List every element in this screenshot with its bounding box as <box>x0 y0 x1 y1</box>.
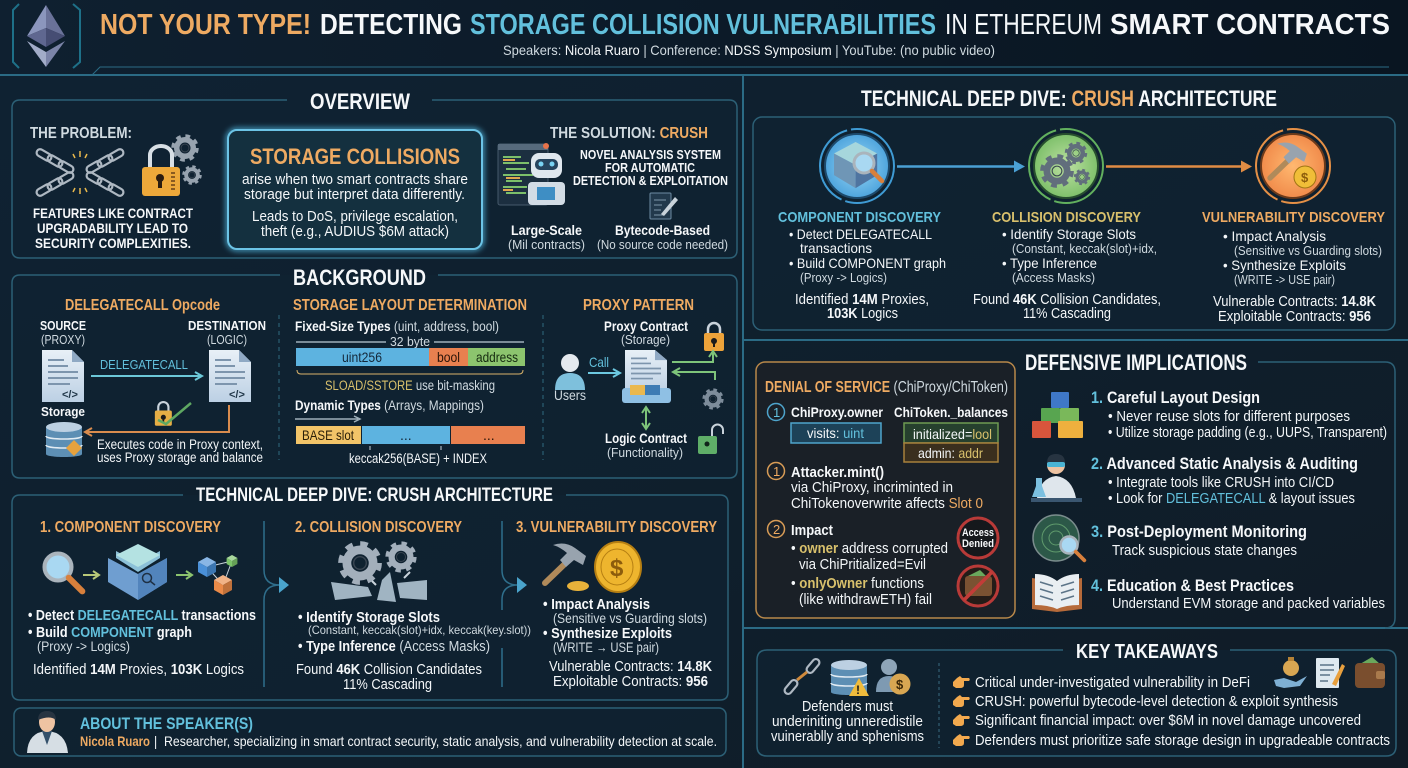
heading: defensive implications: DEFENSIVE IMPLICATIONS <box>1025 350 1247 375</box>
item 1: careful layout design <box>1091 388 1387 441</box>
step 3: impact: Impact <box>791 522 833 539</box>
icon: database warning <box>831 660 869 697</box>
column: vulnerability discovery: 3. VULNERABILITY DISCOVERY <box>516 519 717 536</box>
panel: about the speaker: Nicola Ruaro <box>80 733 150 749</box>
heading: key takeaways: KEY TAKEAWAYS <box>1076 641 1218 663</box>
storage layout diagram: 32 byte <box>390 334 430 349</box>
column: component discovery: • Build COMPONENT graph <box>28 624 192 641</box>
heading: background: BACKGROUND <box>293 265 426 290</box>
delegatecall diagram <box>40 297 266 465</box>
delegatecall diagram: DELEGATECALL Opcode <box>65 297 220 314</box>
column: vulnerability discovery: Exploitable Contracts: 956 <box>553 673 708 690</box>
column: component discovery: • Build COMPONENT graph <box>789 255 946 271</box>
callout: storage collisions: STORAGE COLLISIONS <box>250 144 460 169</box>
panel: key takeaways <box>757 641 1396 756</box>
title: DETECTING <box>320 9 462 41</box>
icon: gears with crack <box>331 544 427 602</box>
icon: vulnerability circle: $ <box>1301 170 1309 185</box>
step 2: attacker mint: 1 <box>773 464 780 479</box>
column: collision discovery: 11% Cascading <box>343 676 432 693</box>
column: vulnerability discovery <box>1202 209 1385 325</box>
delegatecall diagram: Executes code in Proxy context, <box>97 437 263 452</box>
item 3: post-deployment monitoring <box>1091 522 1307 559</box>
icon: user <box>555 354 585 390</box>
solution description: FOR AUTOMATIC <box>605 161 695 175</box>
callout: storage collisions: storage but interpret data differently. <box>244 186 465 203</box>
delegatecall diagram: SOURCE <box>40 318 86 333</box>
column: vulnerability discovery: (Sensitive vs Guarding slots) <box>553 610 707 626</box>
panel: technical deep dive left <box>12 485 728 700</box>
icon: radar <box>1033 515 1084 561</box>
bytecode-based feature: Bytecode-Based <box>615 222 710 238</box>
bar: fixed-size slot layout: uint256 <box>342 349 382 365</box>
column: component discovery: • Detect DELEGATECALL <box>789 226 932 242</box>
step 1: storage slots: admin: addr <box>918 445 983 461</box>
column: collision discovery: • Type Inference (Access Masks) <box>298 638 490 655</box>
column: collision discovery: 11% Cascading <box>1023 306 1111 322</box>
step 2: attacker mint: Attacker.mint() <box>791 464 884 481</box>
storage layout diagram: STORAGE LAYOUT DETERMINATION <box>293 297 527 314</box>
item 3: post-deployment monitoring: Track suspicious state changes <box>1112 543 1297 559</box>
takeaways list: Significant financial impact: over $6M in novel damage uncovered <box>975 713 1361 729</box>
column: component discovery: Identified 14M Proxies, 103K Logics <box>33 661 244 678</box>
icon: document and pen <box>650 193 678 219</box>
step 3: impact <box>768 520 948 608</box>
heading: deep dive: TECHNICAL DEEP DIVE: CRUSH ARCHITECTURE <box>196 485 553 506</box>
icon: cube <box>108 544 167 600</box>
proxy pattern diagram: Call <box>589 354 609 370</box>
step 1: storage slots: initialized=lool <box>913 426 992 442</box>
column: component discovery: • Detect DELEGATECALL transactions <box>28 607 256 624</box>
bytecode-based feature: (No source code needed) <box>597 237 728 252</box>
title <box>100 9 1390 41</box>
icon: access denied: Denied <box>962 538 994 550</box>
bar: fixed-size slot layout <box>296 348 525 366</box>
icon: source document: </> <box>62 389 78 401</box>
the solution heading: THE SOLUTION: CRUSH <box>550 125 708 142</box>
icon: database warning: ! <box>856 683 860 697</box>
column: vulnerability discovery: VULNERABILITY DISCOVERY <box>1202 209 1385 226</box>
arrow: collision to vulnerability <box>1106 160 1252 172</box>
column: component discovery: (Proxy -> Logics) <box>37 638 130 654</box>
step 3: impact: • onlyOwner functions <box>791 576 924 592</box>
column: collision discovery: (Access Masks) <box>1012 270 1095 285</box>
arrow: to logic contract <box>642 407 650 429</box>
panel: crush architecture <box>753 117 1395 330</box>
the problem heading: THE PROBLEM: <box>30 125 132 142</box>
column: component discovery: COMPONENT DISCOVERY <box>778 209 941 226</box>
item 4: education <box>1091 576 1385 612</box>
takeaways list: CRUSH: powerful bytecode-level detection & exploit synthesis <box>975 694 1338 710</box>
icon: ethereum logo <box>13 4 80 68</box>
takeaways list: Critical under-investigated vulnerability in DeFi <box>975 675 1250 691</box>
column: vulnerability discovery: • Impact Analysis <box>543 596 650 613</box>
takeaway note: underiniting unneredistile <box>772 714 923 730</box>
icon: gear <box>704 390 722 408</box>
step 2: attacker mint: via ChiProxy, incriminted in <box>791 480 953 496</box>
icon: open book <box>1032 574 1082 612</box>
icon: blocked wallet <box>958 566 998 606</box>
step 1: storage slots: ChiProxy.owner <box>791 404 883 420</box>
column: vulnerability discovery: (WRITE → USE pair) <box>553 639 659 655</box>
column: collision discovery <box>295 519 531 693</box>
column: vulnerability discovery: • Impact Analysis <box>1223 228 1326 244</box>
icon: component graph <box>198 555 237 595</box>
takeaway note: vuinerablly and sphenisms <box>771 729 924 745</box>
icon: document and pencil <box>1316 658 1345 688</box>
delegatecall diagram: (PROXY) <box>41 332 85 347</box>
step 1: storage slots <box>768 404 1008 462</box>
step 3: impact: • owner address corrupted <box>791 541 948 557</box>
bar: fixed-size slot layout: bool <box>437 349 460 365</box>
column: collision discovery: (Constant, keccak(slot)+idx, <box>1012 241 1157 256</box>
column: vulnerability discovery: (WRITE -> USE pair) <box>1234 272 1335 287</box>
proxy pattern diagram: (Functionality) <box>607 445 683 460</box>
icon: broken chain <box>35 148 125 197</box>
large-scale feature <box>508 222 585 252</box>
icon: lock with check <box>155 402 191 426</box>
icon: scientist <box>1031 454 1082 502</box>
large-scale feature: Large-Scale <box>511 222 582 238</box>
title: SMART CONTRACTS <box>1110 9 1390 41</box>
panel: about the speaker: ABOUT THE SPEAKER(S) <box>80 714 253 733</box>
storage layout diagram: Dynamic Types (Arrays, Mappings) <box>295 397 484 413</box>
takeaway note: Defenders must <box>802 699 893 715</box>
solution description: DETECTION & EXPLOITATION <box>573 174 728 188</box>
column: collision discovery: • Identify Storage Slots <box>1002 226 1136 242</box>
arrow: step 2 to step 3 <box>502 521 527 687</box>
panel: defensive implications <box>1025 350 1395 628</box>
icon: vulnerability circle <box>1256 129 1330 203</box>
column: collision discovery: Found 46K Collision Candidates, <box>973 292 1161 308</box>
bar: dynamic slot layout: BASE slot <box>302 427 354 443</box>
item 2: advanced static analysis <box>1091 454 1358 507</box>
proxy pattern diagram: PROXY PATTERN <box>583 297 694 314</box>
storage layout diagram <box>293 297 527 466</box>
column: component discovery: (Proxy -> Logics) <box>800 270 887 285</box>
panel: denial of service: DENIAL OF SERVICE (ChiProxy/ChiToken) <box>765 379 1008 396</box>
icon: wallet <box>1355 657 1385 688</box>
column: collision discovery: • Type Inference <box>1002 255 1097 271</box>
item 2: advanced static analysis: • Look for DELEGATECALL & layout issues <box>1108 491 1355 507</box>
icon: speaker <box>27 711 68 753</box>
column: vulnerability discovery: (Sensitive vs Guarding slots) <box>1234 243 1382 258</box>
problem description: FEATURES LIKE CONTRACT <box>33 205 193 221</box>
proxy pattern diagram <box>554 297 724 460</box>
step 1: storage slots: 1 <box>773 405 780 420</box>
arrow: step 1 to step 2 <box>264 521 289 687</box>
column: component discovery: Identified 14M Proxies, <box>795 292 929 308</box>
right column divider <box>743 75 1408 768</box>
column: collision discovery: 2. COLLISION DISCOVERY <box>295 519 462 536</box>
item 4: education: 4. Education & Best Practices <box>1091 576 1294 595</box>
arrow: proxy links <box>672 351 717 380</box>
icon: destination document <box>209 350 251 402</box>
column: component discovery: 103K Logics <box>827 306 898 322</box>
icon: magnifier <box>44 554 82 591</box>
icon: component circle <box>820 129 894 203</box>
step 2: attacker mint <box>768 462 983 512</box>
large-scale feature: (Mil contracts) <box>508 237 585 252</box>
icon: destination document: </> <box>229 389 245 401</box>
callout: storage collisions <box>228 130 482 249</box>
step 1: storage slots: ChiToken._balances <box>894 404 1008 420</box>
column: component discovery <box>778 209 946 322</box>
icon: database <box>46 422 82 457</box>
subtitle: Speakers: Nicola Ruaro | Conference: NDSS Symposium | YouTube: (no public video) <box>503 42 995 58</box>
delegatecall diagram: DELEGATECALL <box>100 357 188 372</box>
column: component discovery: 1. COMPONENT DISCOVERY <box>40 519 221 536</box>
title: IN ETHEREUM <box>945 9 1102 41</box>
takeaway note <box>771 699 924 745</box>
item 3: post-deployment monitoring: 3. Post-Deployment Monitoring <box>1091 522 1307 541</box>
step 1: storage slots: visits: uint <box>807 425 864 441</box>
arrow: call <box>588 369 620 377</box>
icon: person with money <box>876 659 910 694</box>
step 2: attacker mint: ChiTokenoverwrite affects Slot 0 <box>791 496 983 512</box>
icon: hand with money bag <box>1274 657 1307 688</box>
problem description <box>33 205 193 251</box>
icon: source document <box>42 350 84 402</box>
step 3: impact: (like withdrawETH) fail <box>799 592 932 608</box>
storage layout diagram: SLOAD/SSTORE use bit-masking <box>325 378 495 393</box>
column: collision discovery: Found 46K Collision Candidates <box>296 661 482 678</box>
icon: person with money: $ <box>896 677 904 692</box>
column: vulnerability discovery: • Synthesize Exploits <box>1223 257 1346 273</box>
arrow: back to storage <box>85 405 229 436</box>
title: STORAGE COLLISION VULNERABILITIES <box>470 9 936 41</box>
delegatecall diagram: (LOGIC) <box>207 332 247 347</box>
icon: hammer and coin <box>545 542 641 592</box>
callout: storage collisions: Leads to DoS, privilege escalation, <box>252 208 458 225</box>
arrow: delegatecall <box>91 372 202 380</box>
column: vulnerability discovery: • Synthesize Exploits <box>543 625 672 642</box>
step 3: impact: via ChiPritialized=Evil <box>799 557 926 573</box>
item 4: education: Understand EVM storage and packed variables <box>1112 596 1385 612</box>
item 1: careful layout design: 1. Careful Layout Design <box>1091 388 1260 407</box>
column: vulnerability discovery: Exploitable Contracts: 956 <box>1218 309 1371 325</box>
solution description: NOVEL ANALYSIS SYSTEM <box>580 148 721 162</box>
problem description: SECURITY COMPLEXITIES. <box>35 235 191 251</box>
takeaways list <box>953 675 1390 749</box>
column: component discovery: transactions <box>800 240 872 256</box>
proxy pattern diagram: Users <box>554 388 586 403</box>
icon: open lock <box>698 425 723 454</box>
column: vulnerability discovery: Vulnerable Contracts: 14.8K <box>549 658 712 675</box>
panel: background <box>12 265 737 478</box>
panel: about the speaker <box>14 708 726 756</box>
title: NOT YOUR TYPE! <box>100 9 311 41</box>
heading: crush architecture: TECHNICAL DEEP DIVE: CRUSH ARCHITECTURE <box>861 86 1277 111</box>
icon: collision circle <box>1029 129 1103 203</box>
column: collision discovery <box>973 209 1161 322</box>
storage layout diagram: Fixed-Size Types (uint, address, bool) <box>295 318 499 334</box>
arrow: component to collision <box>897 160 1025 172</box>
callout: storage collisions: arise when two smart contracts share <box>242 171 468 188</box>
icon: proxy document <box>622 350 671 403</box>
icon: closed lock <box>704 323 724 351</box>
icon: access denied: Access <box>962 527 994 539</box>
panel: denial of service <box>756 362 1015 618</box>
bar: dynamic slot layout: ... <box>400 427 412 443</box>
panel: about the speaker: | Researcher, specializing in smart contract security, static analysis, and vulnerability detection at scale. <box>154 733 717 749</box>
delegatecall diagram: Storage <box>41 404 85 419</box>
icon: chain <box>783 658 821 695</box>
solution description <box>573 148 728 188</box>
panel: overview <box>12 89 737 258</box>
item 2: advanced static analysis: • Integrate tools like CRUSH into CI/CD <box>1108 475 1334 491</box>
column: vulnerability discovery: Vulnerable Contracts: 14.8K <box>1213 294 1376 310</box>
column: vulnerability discovery <box>516 519 717 690</box>
bar: dynamic slot layout: ... <box>483 427 495 443</box>
item 2: advanced static analysis: 2. Advanced Static Analysis & Auditing <box>1091 454 1358 473</box>
step 3: impact: 2 <box>773 522 780 537</box>
column: component discovery <box>28 519 256 678</box>
column: collision discovery: COLLISION DISCOVERY <box>992 209 1141 226</box>
storage layout diagram: keccak256(BASE) + INDEX <box>349 451 487 466</box>
icon: access denied <box>958 518 998 558</box>
problem description: UPGRADABILITY LEAD TO <box>37 220 188 236</box>
proxy pattern diagram: (Storage) <box>621 332 670 347</box>
delegatecall diagram: DESTINATION <box>188 318 266 333</box>
proxy pattern diagram: Proxy Contract <box>604 318 688 334</box>
header <box>0 0 1408 75</box>
bar: fixed-size slot layout: address <box>476 349 518 365</box>
icon: building blocks <box>1032 392 1083 438</box>
proxy pattern diagram: Logic Contract <box>605 430 687 446</box>
column: collision discovery: (Constant, keccak(slot)+idx, keccak(key.slot)) <box>308 623 531 637</box>
icon: hammer and coin: $ <box>610 555 624 582</box>
delegatecall diagram: uses Proxy storage and balance <box>97 450 263 465</box>
bar: dynamic slot layout <box>296 426 525 444</box>
column: collision discovery: • Identify Storage Slots <box>298 609 440 626</box>
bytecode-based feature <box>597 222 728 252</box>
icon: robot with code window <box>498 143 565 205</box>
callout: storage collisions: theft (e.g., AUDIUS $6M attack) <box>261 223 449 240</box>
item 1: careful layout design: • Never reuse slots for different purposes <box>1108 409 1350 425</box>
heading: overview: OVERVIEW <box>310 89 410 114</box>
icon: lock and gears <box>142 137 200 196</box>
